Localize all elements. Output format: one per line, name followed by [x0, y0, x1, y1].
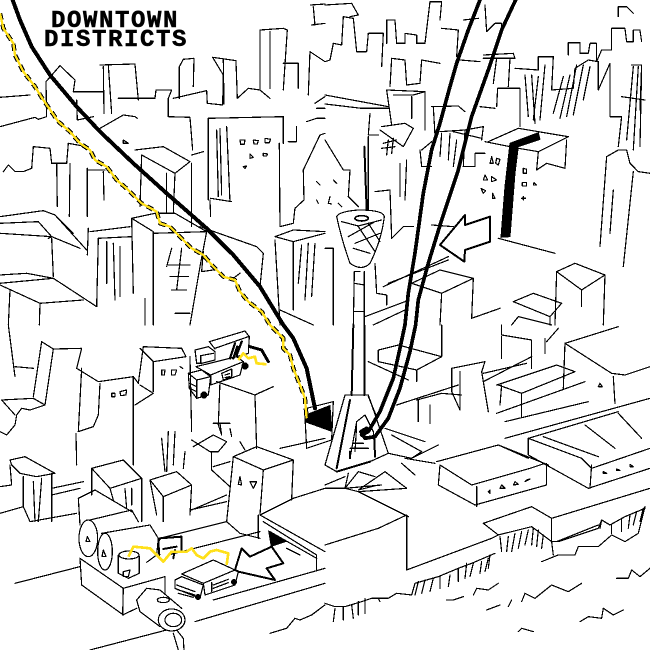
black line: first cable to tower — [362, 0, 480, 435]
bus wheels — [195, 579, 237, 600]
arrow: upper right pointing left — [440, 215, 490, 262]
skyline: lower right waterfront blocks — [325, 325, 650, 632]
doorway frame — [305, 402, 333, 448]
truck wheels — [200, 362, 248, 398]
yellow line: route across the pier — [128, 547, 228, 565]
yellow line: long dashed route from upper left — [0, 13, 307, 418]
skyline: lower left blocks — [0, 325, 325, 650]
black line: long cable from upper left — [13, 0, 315, 408]
vehicle: bus on the pier — [175, 560, 238, 598]
title: DOWNTOWN — [51, 8, 179, 35]
building edge: heavy vertical stroke on upper right tower — [501, 133, 540, 237]
vehicle: truck cab and box near the tower — [188, 331, 249, 398]
monument: tower base and column — [325, 325, 388, 472]
arrow: lower pointing right at the pier — [235, 547, 283, 580]
skyline: upper left blocks — [0, 4, 325, 325]
title — [44, 8, 188, 54]
skyline: upper right blocks — [325, 2, 650, 325]
title: DISTRICTS — [44, 27, 188, 54]
black line: second cable to tower — [361, 0, 516, 438]
dark doorway block — [306, 407, 331, 430]
yellow line: branch to truck — [238, 353, 267, 364]
spike on the tower — [355, 147, 368, 221]
dark vent on the pier building — [270, 533, 284, 545]
machine: cylinders and generator on the block — [78, 490, 185, 650]
black line: short cable behind truck — [250, 347, 268, 362]
